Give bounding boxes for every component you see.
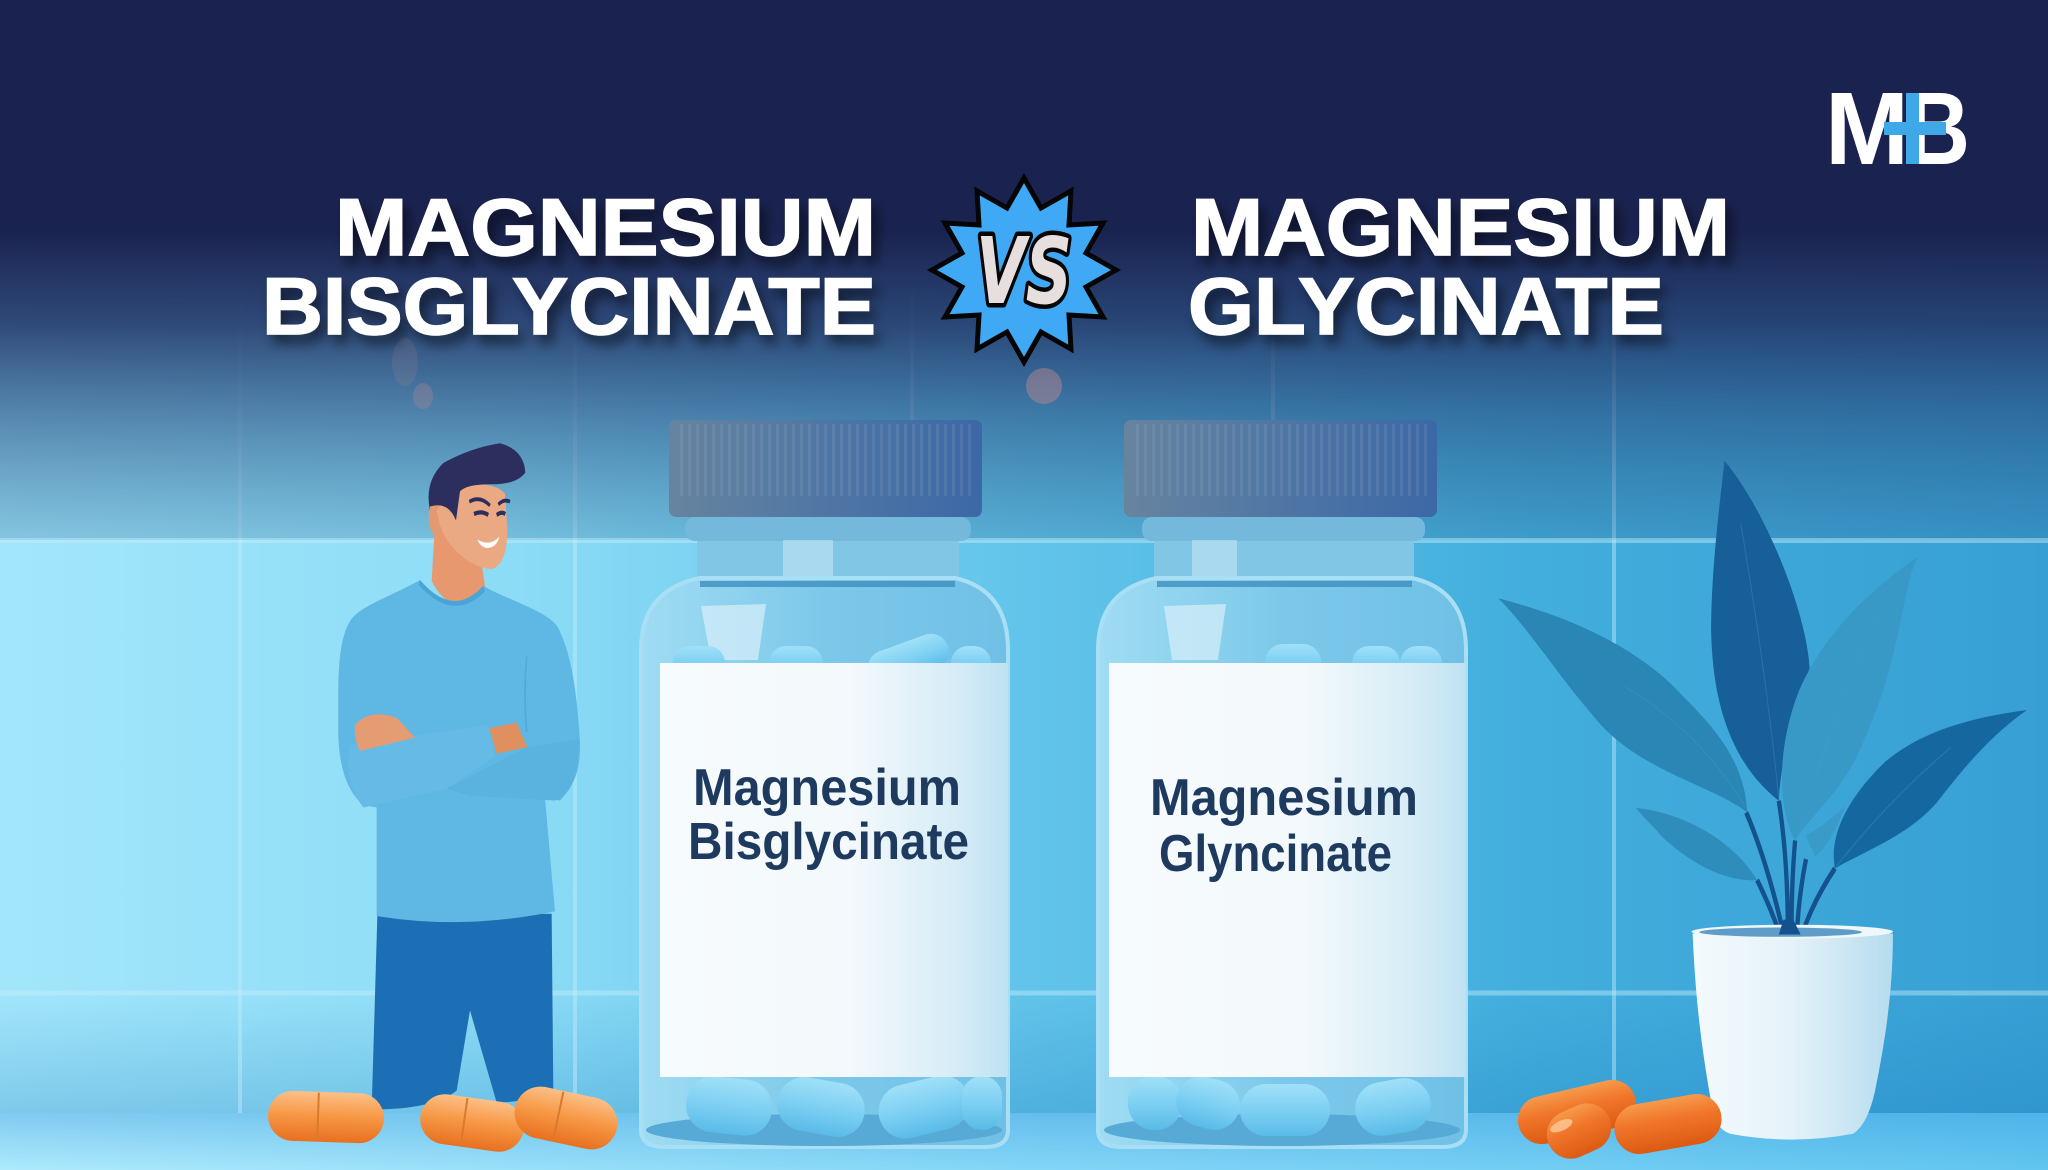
bottle 1: magnesium bisglycinate: Bisglycinate: [688, 813, 969, 871]
VS starburst badge: VS: [976, 218, 1072, 325]
bottle 2: magnesium glycinate: Magnesium: [1150, 769, 1418, 827]
title: left: MAGNESIUM: [335, 183, 876, 273]
logo: MB with plus: M: [1825, 71, 1909, 186]
orange capsules near man: [267, 1082, 622, 1155]
title: left: [262, 183, 876, 352]
bottle 1: magnesium bisglycinate: Magnesium: [693, 759, 961, 817]
title: right: [1188, 183, 1730, 352]
bottle 2: magnesium glycinate: [1098, 420, 1466, 1147]
logo: MB with plus: B: [1906, 71, 1970, 186]
VS starburst badge: [932, 178, 1116, 362]
orange capsules near plant: [1513, 1075, 1726, 1166]
title: left: BISGLYCINATE: [262, 262, 876, 352]
bottle 2: magnesium glycinate: Glyncinate: [1159, 825, 1392, 883]
bottle 1: magnesium bisglycinate: [641, 420, 1008, 1147]
logo: MB with plus: [1825, 71, 1970, 186]
shelf: [0, 1113, 2048, 1170]
title: right: MAGNESIUM: [1191, 183, 1730, 273]
title: right: GLYCINATE: [1188, 262, 1664, 352]
man with crossed arms: [338, 443, 580, 1110]
potted plant: [1498, 461, 2027, 1140]
